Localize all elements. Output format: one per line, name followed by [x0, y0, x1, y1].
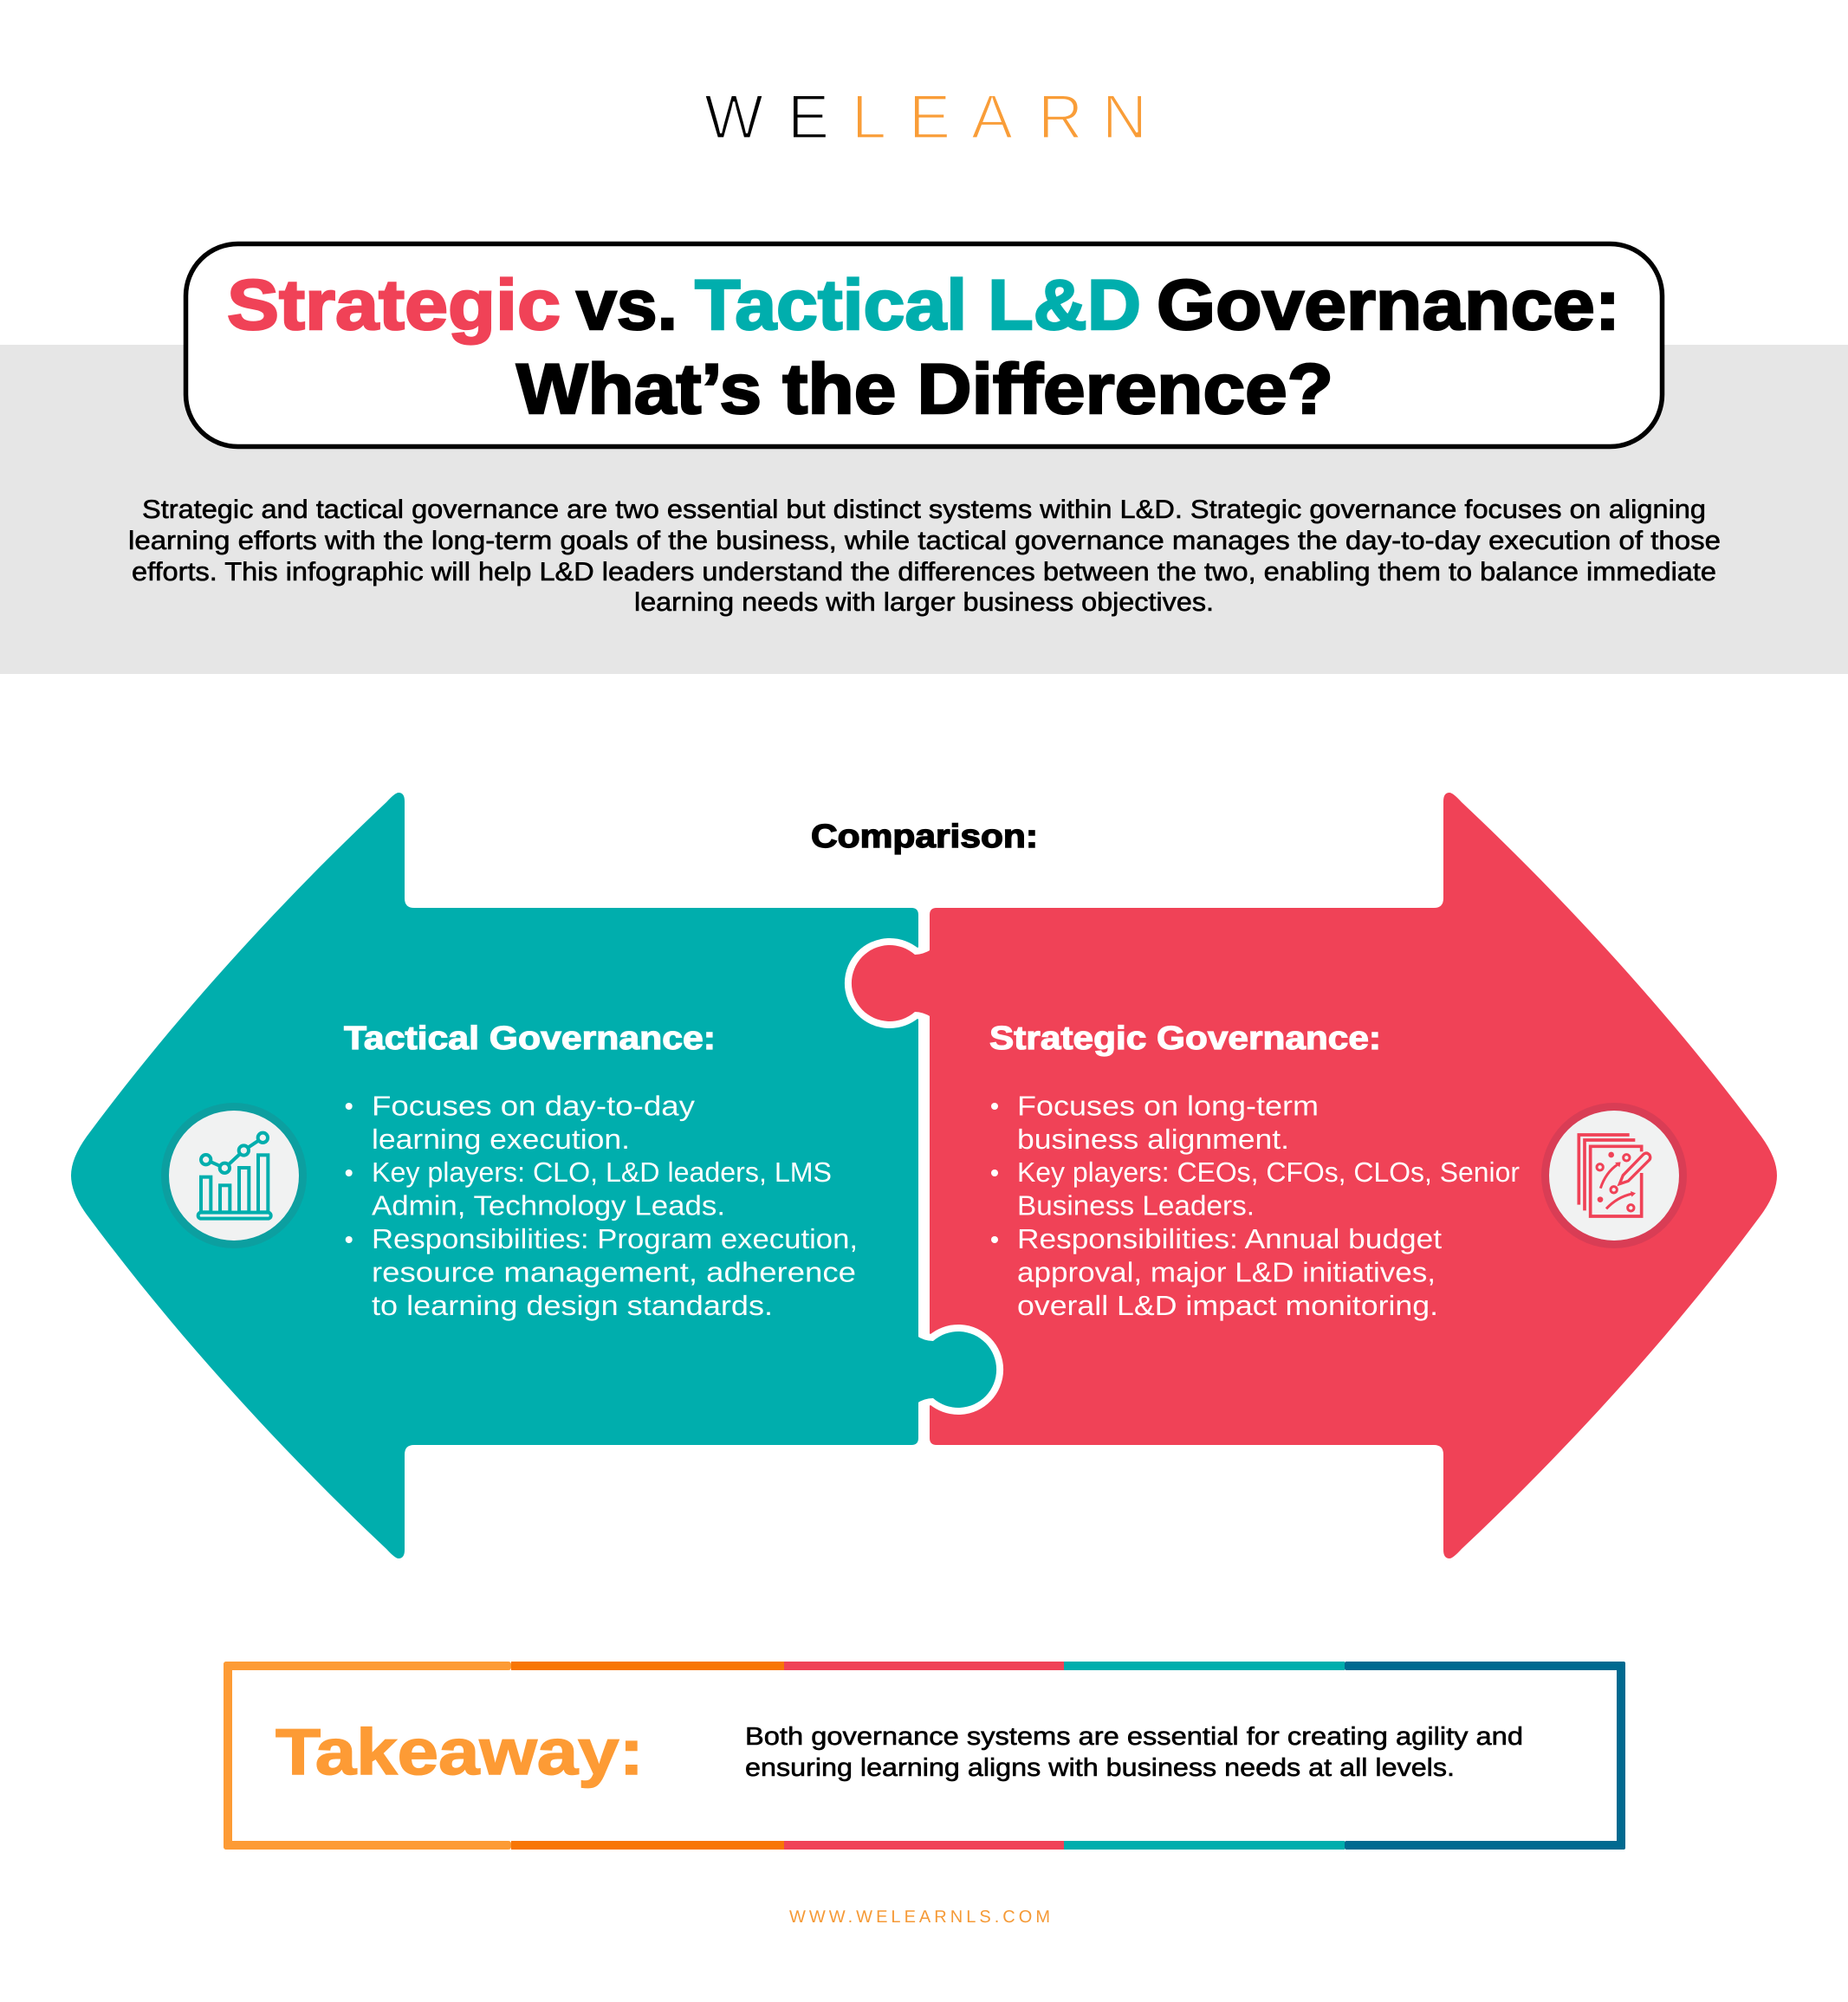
comparison heading: Comparison: [811, 819, 1038, 855]
takeaway multicolour border [224, 1662, 1625, 1850]
title line 1 [227, 266, 1620, 345]
strategic bullets: business alignment. [1017, 1124, 1289, 1155]
tactical bullets: Key players: CLO, L&D leaders, LMS [372, 1156, 832, 1188]
panel: strategic arrow (red, pointing right) [917, 793, 1777, 1558]
title box [185, 244, 1662, 447]
icon: bar chart in circle [161, 1103, 307, 1248]
strategic bullets: Responsibilities: Annual budget [1017, 1223, 1442, 1254]
intro paragraph: learning efforts with the long-term goals of the business, while tactical governance manages the day-to-day execution of those [128, 527, 1721, 555]
title line 1: Governance: [1157, 266, 1620, 345]
logo: WELEARN: E [788, 83, 829, 152]
strategic bullets: Key players: CEOs, CFOs, CLOs, Senior [1017, 1156, 1520, 1188]
jigsaw tab: teal into red [917, 1331, 996, 1408]
tactical bullets: Admin, Technology Leads. [372, 1190, 725, 1221]
logo: WELEARN: R [1038, 83, 1083, 152]
panel: tactical arrow (teal, pointing left) [71, 793, 918, 1558]
intro paragraph [128, 496, 1721, 617]
tactical bullets: Responsibilities: Program execution, [372, 1223, 858, 1254]
logo: WELEARN: E [909, 83, 950, 152]
icon: strategy documents in circle [1541, 1103, 1687, 1248]
takeaway text [745, 1723, 1523, 1782]
strategic bullets: Focuses on long-term [1017, 1090, 1319, 1121]
grey intro band [0, 345, 1848, 674]
tactical bullets: resource management, adherence [372, 1256, 856, 1287]
jigsaw tab: red into teal [852, 945, 931, 1021]
white outline of the teal tab [917, 1331, 996, 1408]
takeaway text: Both governance systems are essential for creating agility and [745, 1723, 1523, 1751]
tactical bullets: learning execution. [372, 1124, 630, 1155]
tactical bullets [346, 1090, 858, 1321]
strategic heading: Strategic Governance: [989, 1020, 1381, 1057]
intro paragraph: Strategic and tactical governance are two essential but distinct systems within L&D. Strategic governance focuses on aligning [142, 496, 1706, 524]
takeaway text: ensuring learning aligns with business needs at all levels. [745, 1754, 1455, 1782]
logo: WELEARN: W [704, 83, 763, 152]
logo: WELEARN: A [971, 83, 1013, 152]
takeaway panel [224, 1662, 1625, 1850]
footer url: WWW.WELEARNLS.COM [789, 1908, 1050, 1927]
strategic bullets: overall L&D impact monitoring. [1017, 1290, 1438, 1321]
tactical bullets: to learning design standards. [372, 1290, 773, 1321]
tactical bullets: Focuses on day-to-day [372, 1090, 695, 1121]
tactical heading: Tactical Governance: [344, 1020, 716, 1057]
title line 2: What’s the Difference? [516, 350, 1333, 429]
title line 1: vs. [576, 266, 678, 345]
title line 1: Strategic [227, 266, 561, 345]
strategic bullets [991, 1090, 1520, 1321]
logo: WELEARN: N [1102, 83, 1147, 152]
intro paragraph: learning needs with larger business objectives. [634, 588, 1214, 617]
strategic governance text [989, 1020, 1520, 1321]
intro paragraph: efforts. This infographic will help L&D leaders understand the differences between the two, enabling them to balance immediate [132, 558, 1716, 586]
logo: WELEARN [704, 83, 1147, 152]
tactical governance text [344, 1020, 858, 1321]
title line 1: Tactical L&D [695, 266, 1141, 345]
takeaway heading: Takeaway: [276, 1715, 644, 1788]
logo: WELEARN: L [852, 83, 886, 152]
strategic bullets: Business Leaders. [1017, 1190, 1255, 1221]
strategic bullets: approval, major L&D initiatives, [1017, 1256, 1436, 1287]
